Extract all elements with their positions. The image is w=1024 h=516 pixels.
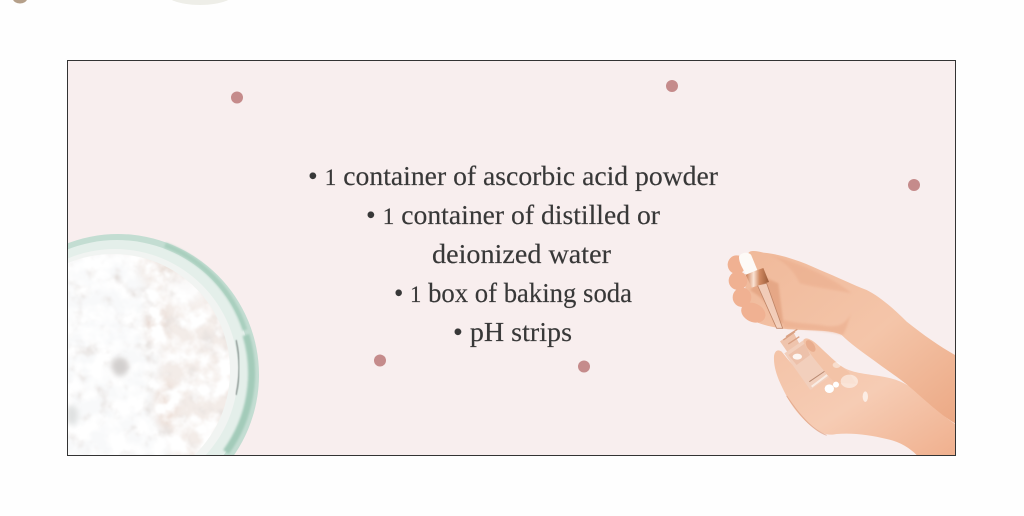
list item: pH strips: • pH strips [453,317,572,347]
supplies list [308,161,718,347]
thumb beside bottle [804,340,850,383]
lower hand [774,338,955,455]
dropper collar [745,268,769,288]
photo: hands with dropper and bottle [728,251,955,455]
panel: supplies background [68,60,956,456]
shadow on back of thumb [783,260,848,292]
thumb nail [806,340,816,352]
lower hand finger crease [787,396,827,435]
finger shadow behind dropper [750,277,783,323]
photo: jar of white powder [68,234,259,455]
shadow under upper palm [784,319,848,336]
glass bottle [780,329,830,390]
list item: water continued: deionized water [432,239,611,269]
top-left cropped brown dot [13,0,27,4]
fingers holding dropper [728,255,766,323]
dropper bulb [739,253,757,275]
list item: ascorbic acid: • 1 container of ascorbic acid powder [308,161,718,191]
list item: baking soda: • 1 box of baking soda [394,278,632,308]
dropper tube [757,283,783,328]
upper hand and forearm [744,251,955,423]
list item: water: • 1 container of distilled or [366,200,660,230]
cream drops [825,362,868,402]
decorative dots [231,80,920,372]
bottle highlight [793,354,802,360]
top cropped pale ellipse [162,0,238,5]
